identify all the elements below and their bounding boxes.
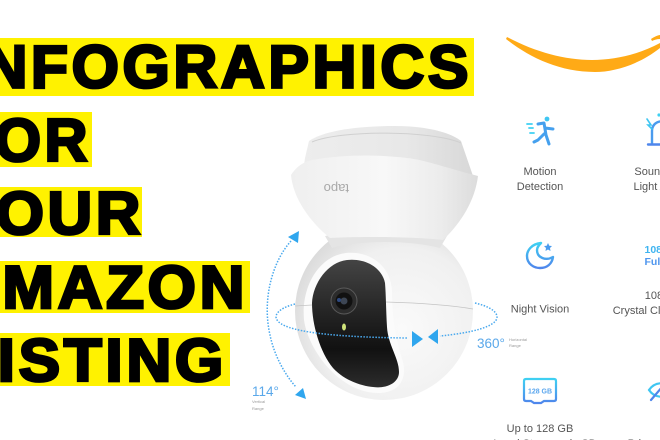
amazon smile logo — [506, 35, 660, 72]
motion detection label: Detection — [517, 181, 563, 193]
highlight bar: line 2 — [0, 112, 92, 167]
camera head skirt — [291, 156, 478, 240]
night vision label: Night Vision — [511, 304, 569, 316]
storage label: Up to 128 GB — [507, 423, 573, 435]
360 degree label: 360° — [477, 336, 505, 351]
security camera product — [291, 126, 478, 400]
highlight bar: line 5 — [0, 333, 230, 386]
shadow under head — [325, 233, 447, 248]
feature: motion detection — [517, 117, 563, 193]
vertical range caption: Vertical — [252, 399, 265, 404]
camera black face — [312, 260, 399, 387]
right arrowhead — [428, 329, 438, 344]
feature: 1080p full hd — [613, 244, 660, 317]
vertical range caption: Range — [252, 406, 265, 411]
horizontal range caption: Range — [509, 343, 522, 348]
bottom arrowhead — [295, 388, 306, 399]
tapo logo: tapo — [324, 181, 349, 196]
icon: crossed eye — [649, 380, 660, 400]
horizontal rotation indicator — [276, 303, 527, 351]
left arrowhead — [412, 331, 423, 347]
camera white face ring — [304, 253, 404, 393]
camera lens — [331, 288, 357, 314]
motion detection label: Motion — [523, 166, 557, 178]
status led — [342, 324, 346, 330]
feature: sound and light alarm — [633, 113, 660, 193]
highlight bar: line 3 — [0, 187, 142, 237]
dotted arc — [267, 241, 296, 387]
feature: privacy mode — [628, 380, 660, 440]
camera top cap — [303, 126, 473, 176]
top arrowhead — [288, 231, 299, 243]
feature: night vision — [511, 243, 569, 316]
camera ball body — [295, 222, 473, 400]
vertical tilt indicator — [252, 231, 306, 411]
feature: 128 gb storage — [493, 379, 597, 440]
dotted orbit — [276, 304, 407, 338]
body seam — [295, 302, 473, 309]
114 degree label: 114° — [252, 384, 279, 399]
horizontal range caption: Horizontal — [509, 337, 527, 342]
icon: alarm siren — [647, 113, 660, 144]
headline: infographics for your amazon listing — [0, 34, 474, 394]
icon: moon and star — [527, 243, 553, 268]
highlight bar: line 1 — [0, 38, 474, 96]
highlight bar: line 4 — [0, 261, 250, 313]
icon: running person — [527, 117, 553, 144]
icon: memory card: 128 GB — [528, 388, 552, 396]
